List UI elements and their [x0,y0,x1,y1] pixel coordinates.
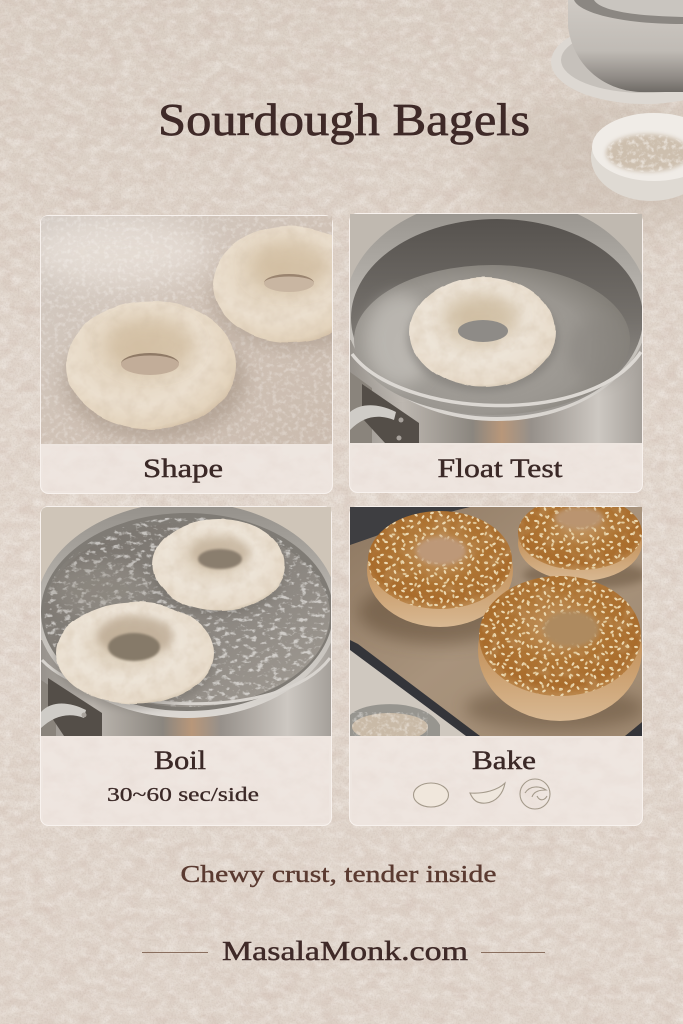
icon: swirl roll [520,779,550,809]
icon: dough ball [414,783,448,807]
photo: shaped dough rings on floured surface [41,216,332,444]
icon: bowl of sesame [350,704,440,736]
icon: pot handle [41,678,102,736]
photo: dough ring floating in pot of water [350,214,642,443]
panel: bake [350,496,647,826]
label: Float Test: Float Test [438,454,563,483]
photo: dough rings in boiling water [36,502,338,736]
icon: crescent clove [470,783,505,803]
decorative props: small bowl of oats [591,113,683,201]
bagel: front [476,574,644,721]
footer: website credit: MasalaMonk.com [222,936,468,966]
bagel: back right [518,507,642,580]
photo: baked sesame bagels on parchment tray [350,496,647,741]
panel: shape [40,215,333,494]
bagel: back left [366,510,516,627]
panel: float test [345,197,649,492]
icon: pot handle [350,372,419,443]
title: Sourdough Bagels [158,94,530,145]
tagline: Chewy crust, tender inside [180,862,496,888]
label: Shape: Shape [143,454,223,483]
panel: boil [36,502,338,826]
decorative props: steel bowl on saucer [551,0,683,104]
label: Bake: Bake [472,746,536,775]
label: Boil: Boil [154,746,206,775]
label: boil time: 30~60 sec/side [107,784,259,806]
